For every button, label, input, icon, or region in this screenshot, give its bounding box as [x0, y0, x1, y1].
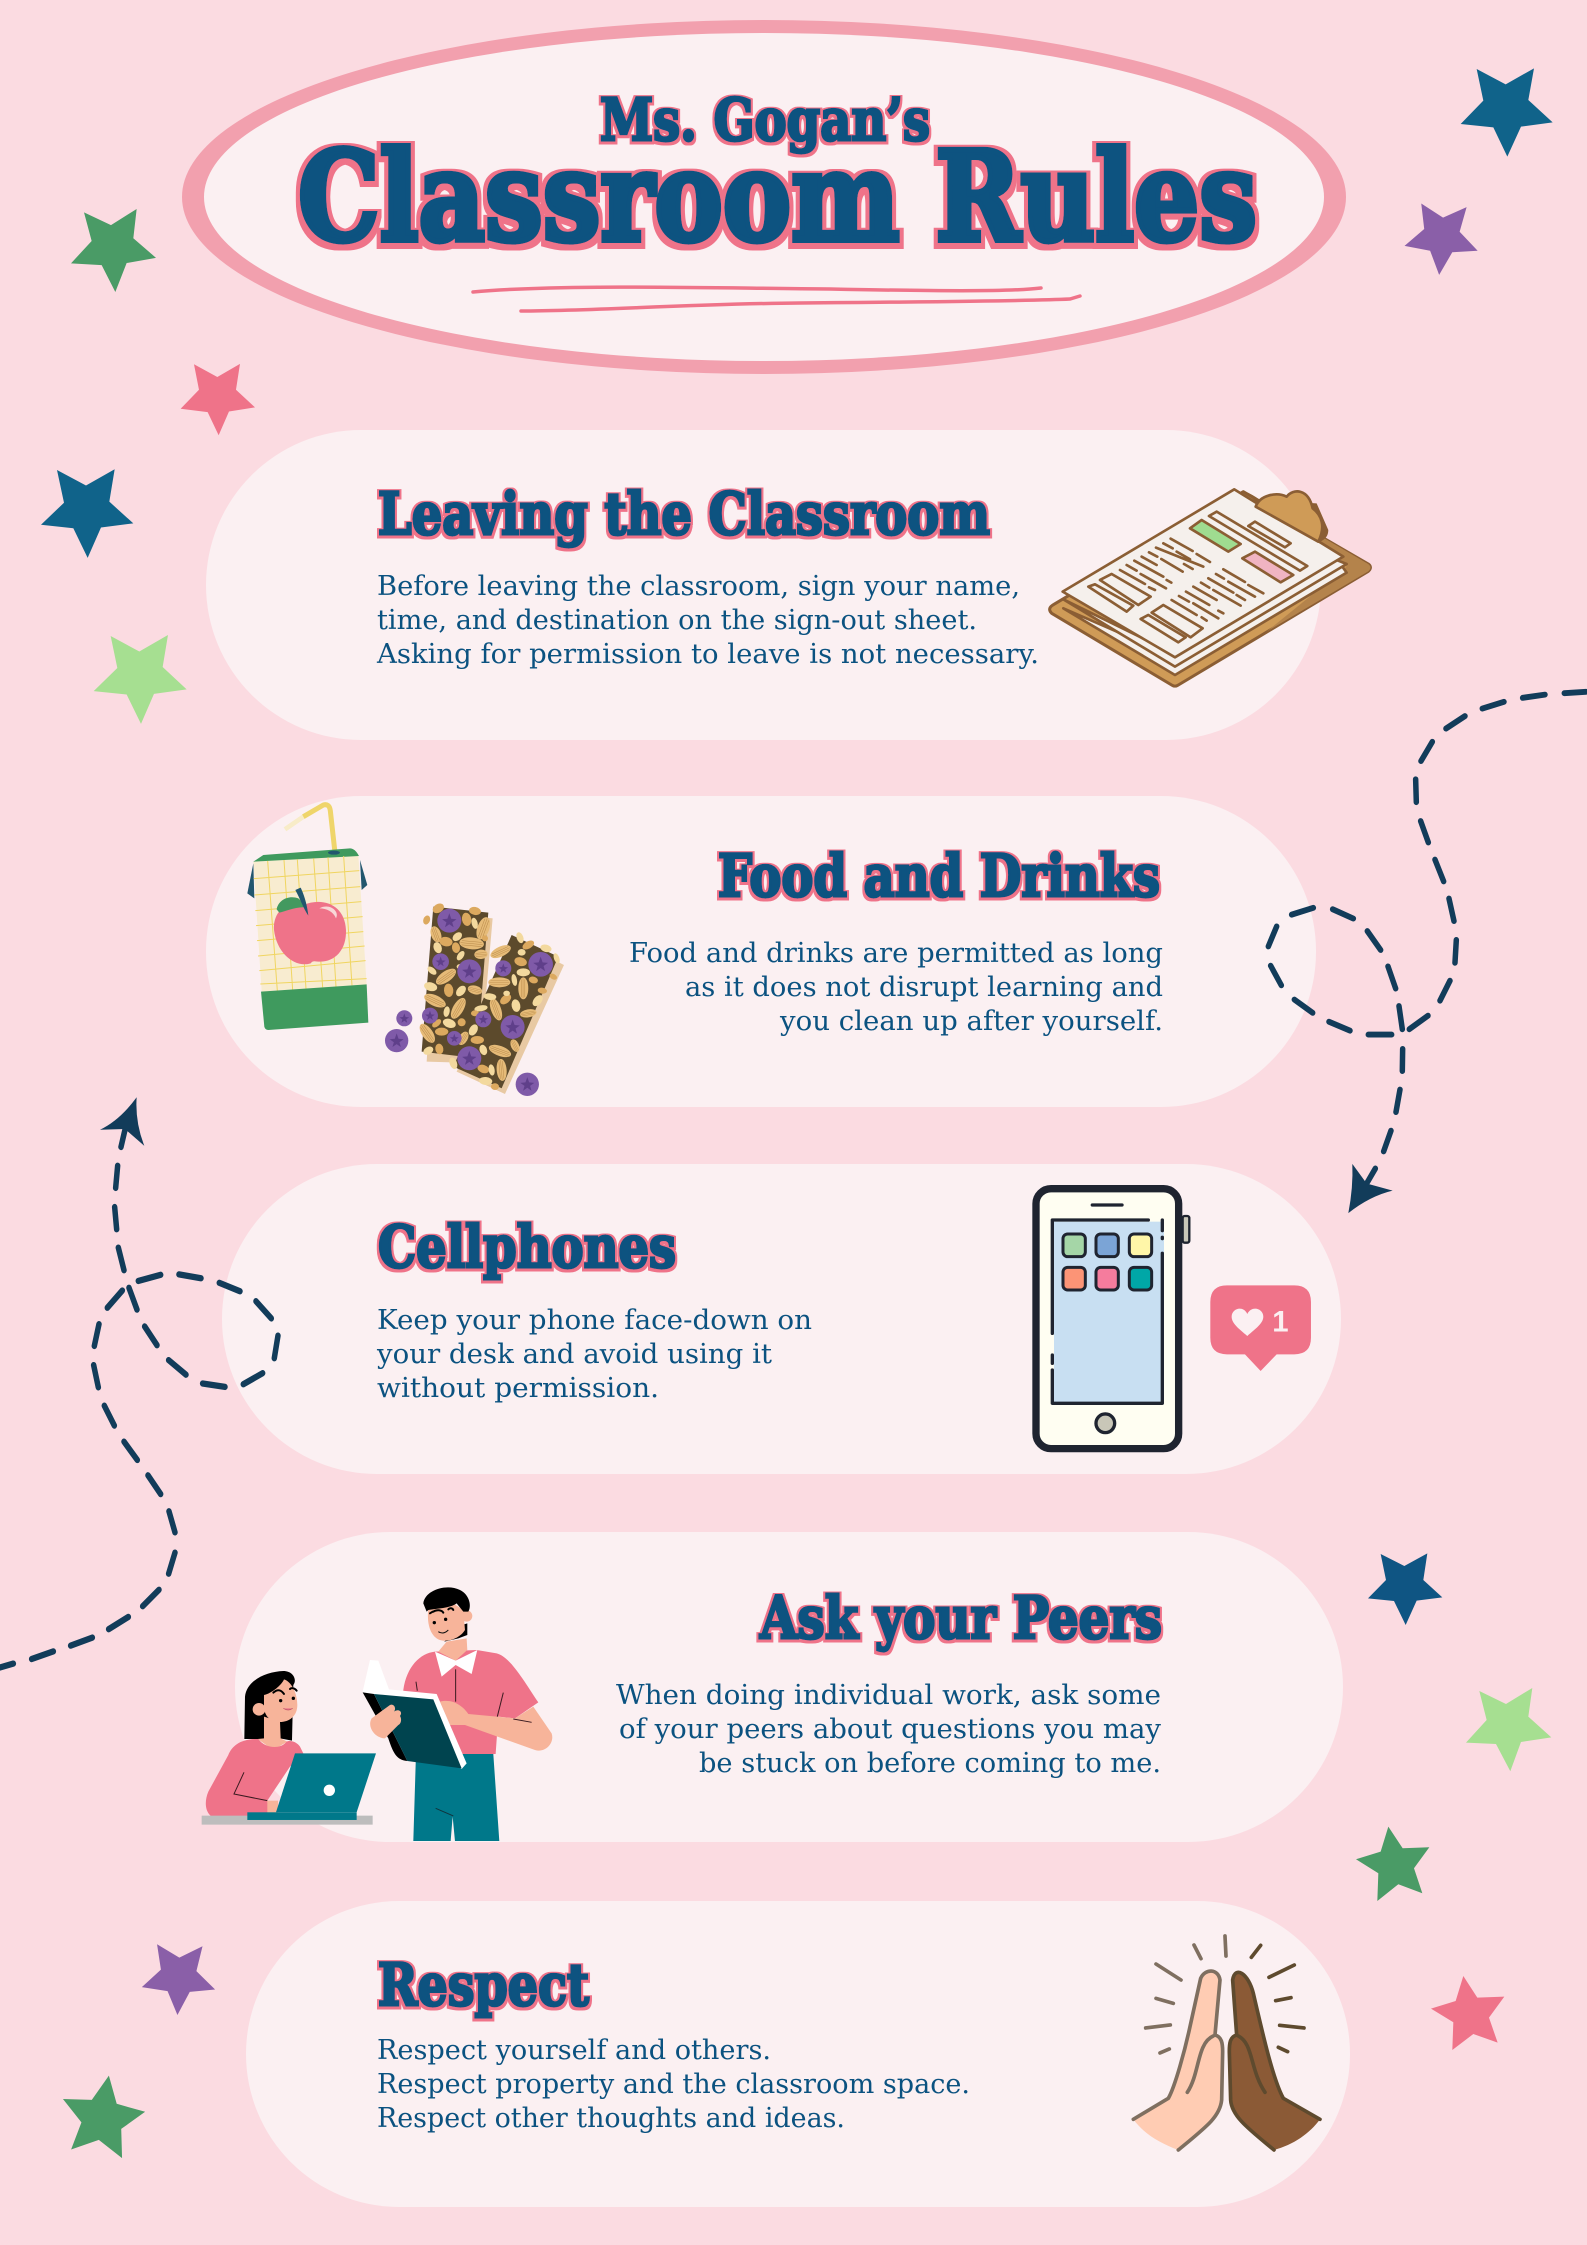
text: food and drinks rule: as it does not disrupt learning and	[685, 971, 1163, 1003]
text: leaving the classroom rule: time, and destination on the sign-out sheet.	[377, 604, 977, 636]
heading: respect: Respect	[378, 1951, 589, 2019]
icon: like notification bubble	[1210, 1285, 1311, 1371]
text: food and drinks rule: Food and drinks are permitted as long	[629, 937, 1163, 969]
panel: leaving the classroom	[206, 430, 1321, 740]
text: respect rule: Respect property and the classroom space.	[377, 2068, 970, 2100]
text: ask your peers rule: When doing individual work, ask some	[616, 1679, 1161, 1711]
text: food and drinks rule	[629, 937, 1163, 1037]
heading: cellphones: Cellphones	[378, 1213, 676, 1281]
title oval badge	[182, 20, 1346, 374]
title underline strokes	[473, 287, 1080, 311]
text: cellphones rule: your desk and avoid using it	[376, 1338, 772, 1370]
text: leaving the classroom rule: Before leaving the classroom, sign your name,	[377, 570, 1020, 602]
panel: food and drinks	[206, 796, 1316, 1107]
text: leaving the classroom rule	[376, 570, 1039, 670]
text: food and drinks rule: you clean up after yourself.	[779, 1005, 1163, 1037]
illustration: girl at laptop	[202, 1671, 376, 1825]
text: ask your peers rule	[616, 1679, 1161, 1779]
text: respect rule: Respect other thoughts and ideas.	[377, 2102, 845, 2134]
icon: smartphone	[1036, 1189, 1189, 1449]
title: classroom rules: Classroom Rules	[298, 125, 1257, 270]
text: leaving the classroom rule: Asking for permission to leave is not necessary.	[376, 638, 1039, 670]
text: respect rule: Respect yourself and others.	[377, 2034, 771, 2066]
icon: juice box	[247, 805, 368, 1030]
heading: food and drinks: Food and Drinks	[718, 842, 1160, 910]
text: ask your peers rule: of your peers about questions you may	[619, 1713, 1161, 1745]
text: cellphones rule	[376, 1304, 812, 1404]
dashed arrow: left side	[0, 1097, 278, 1667]
heading: leaving the classroom: Leaving the Classroom	[378, 480, 990, 548]
title: teacher name: Ms. Gogan’s	[600, 86, 930, 154]
text: cellphones rule: without permission.	[377, 1372, 659, 1404]
text: respect rule	[377, 2034, 970, 2134]
illustration: boy reading book	[363, 1587, 552, 1841]
panel: ask your peers	[235, 1532, 1343, 1842]
icon: like notification bubble: 1	[1272, 1305, 1289, 1338]
icon: granola bars with blueberries	[385, 902, 564, 1096]
text: ask your peers rule: be stuck on before coming to me.	[699, 1747, 1161, 1779]
icon: high five hands	[1133, 1936, 1320, 2150]
panel: respect	[246, 1901, 1350, 2207]
text: cellphones rule: Keep your phone face-down on	[377, 1304, 812, 1336]
icon: clipboard with papers	[1050, 489, 1370, 686]
heading: ask your peers: Ask your Peers	[759, 1584, 1162, 1652]
panel: cellphones	[222, 1164, 1341, 1474]
dashed arrow: right side	[1268, 692, 1586, 1213]
